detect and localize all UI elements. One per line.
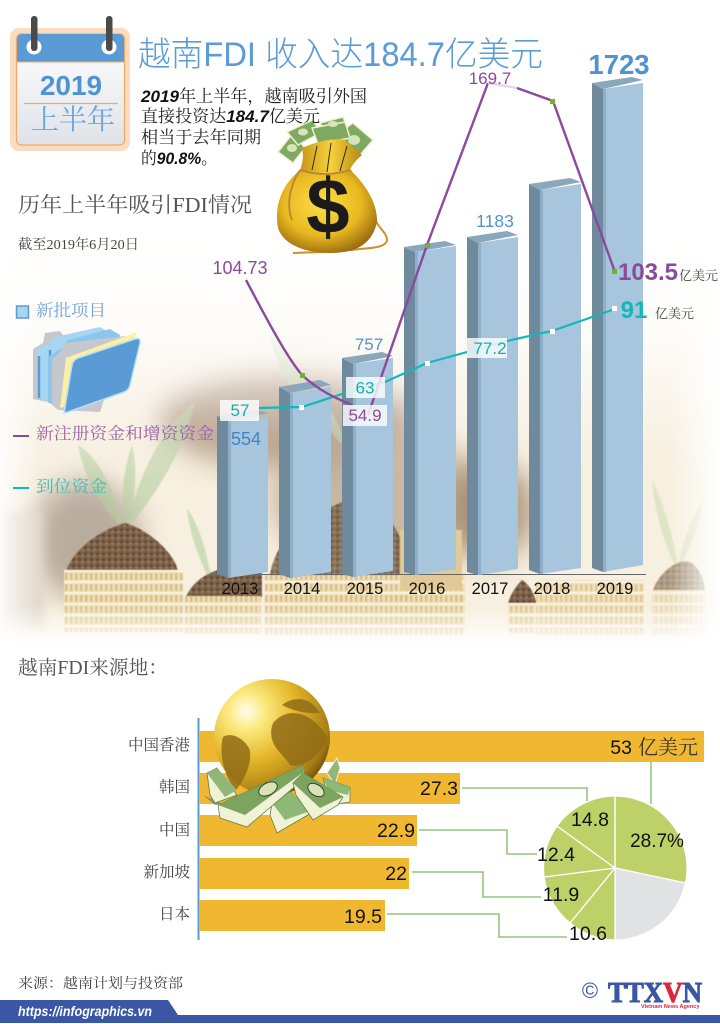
pie labels: 11.9 (543, 884, 579, 906)
intro text: 的90.8%。 (141, 149, 217, 168)
calendar icon: 2019 (40, 70, 102, 101)
teal value boxes: 63 (356, 378, 374, 398)
icon: folders (33, 327, 140, 413)
line: disbursed capital (259, 306, 617, 410)
bar 2016 (404, 241, 456, 575)
logo: TTXVN: TTXVN (608, 977, 702, 1009)
chart heading: 历年上半年吸引FDI情况 (18, 193, 252, 217)
year labels: 2019 (597, 580, 633, 598)
logo: TTXVN: Vietnam News Agency (641, 1004, 700, 1010)
bar chart: new projects (217, 77, 643, 578)
intro text (140, 86, 367, 168)
calendar icon: 上半年 (31, 104, 115, 135)
purple value labels: 103.5 (618, 259, 678, 286)
pie labels: 10.6 (569, 923, 607, 945)
icon: money bag: $ (306, 162, 350, 250)
year labels: 2013 (222, 580, 258, 598)
title: 越南FDI 收入达184.7亿美元 (138, 36, 543, 74)
intro text: 2019年上半年，越南吸引外国 (140, 86, 367, 106)
teal value boxes: 57 (231, 401, 249, 420)
horizontal bar chart: FDI sources: 韩国 (159, 778, 190, 796)
pie chart (543, 796, 687, 940)
pie labels (537, 809, 684, 945)
calendar icon (10, 16, 130, 151)
horizontal bar chart: FDI sources: 亿美元 (638, 736, 698, 759)
bar 2018 (529, 178, 581, 574)
year labels (222, 580, 633, 598)
purple value labels: 169.7 (469, 69, 511, 88)
bar 2019 (592, 77, 643, 572)
legend: disbursed capital: 到位资金 (36, 477, 107, 496)
chart axis (209, 574, 646, 576)
horizontal bar chart: FDI sources: 53 (610, 737, 632, 759)
horizontal bar chart: FDI sources: 22.9 (377, 820, 415, 842)
purple value labels: 54.9 (348, 406, 382, 425)
year labels: 2017 (472, 580, 508, 598)
horizontal bar chart: FDI sources: 22 (385, 863, 407, 885)
purple value labels (212, 69, 678, 426)
year labels: 2016 (409, 580, 445, 598)
footer band: https://infographics.vn (18, 1003, 152, 1019)
bar value labels: 1723 (588, 49, 650, 80)
icon: golden globe with money (203, 679, 350, 833)
pie labels: 12.4 (537, 844, 575, 866)
horizontal bar chart: FDI sources (128, 718, 704, 940)
line: registered capital (246, 83, 617, 415)
teal value boxes (220, 297, 647, 421)
unit labels: 亿美元 (655, 306, 694, 321)
teal value boxes: 77.2 (473, 339, 507, 358)
background photo: coins and seedlings (2, 334, 707, 636)
intro text: 相当于去年同期 (141, 127, 261, 147)
bar value labels: 554 (231, 429, 261, 449)
source note: 来源：越南计划与投资部 (18, 975, 183, 992)
legend: new projects: 新批项目 (36, 301, 106, 320)
bar value labels: 1183 (476, 211, 514, 231)
horizontal bar chart: FDI sources: 新加坡 (143, 863, 190, 881)
footer band (0, 1000, 720, 1023)
horizontal bar chart: FDI sources: 19.5 (344, 906, 382, 928)
horizontal bar chart: FDI sources: 27.3 (420, 778, 458, 800)
pie labels: 14.8 (571, 809, 609, 831)
bar value labels (231, 49, 650, 449)
bar value labels: 757 (355, 335, 383, 354)
unit labels (655, 268, 718, 321)
leader lines (387, 762, 651, 937)
intro text: 直接投资达184.7亿美元 (141, 106, 320, 126)
bar 2017 (467, 231, 518, 575)
horizontal bar chart: FDI sources: 中国 (159, 821, 190, 839)
legend: newly registered capital: 新注册资金和增资资金 (36, 424, 214, 443)
year labels: 2018 (534, 580, 570, 598)
bar 2015 (342, 352, 393, 577)
bar 2014 (279, 380, 331, 578)
year labels: 2014 (284, 580, 320, 598)
teal value boxes: 91 (621, 297, 647, 324)
unit labels: 亿美元 (679, 268, 718, 283)
purple value labels: 104.73 (212, 258, 268, 278)
icon: money bag (277, 117, 387, 253)
horizontal bar chart: FDI sources: 中国香港 (128, 736, 190, 754)
logo: TTXVN: © (582, 978, 598, 1003)
horizontal bar chart: FDI sources: 日本 (159, 905, 190, 923)
pie labels: 28.7% (630, 831, 684, 852)
chart subheading: 截至2019年6月20日 (18, 236, 139, 253)
bar 2013 (217, 410, 268, 578)
year labels: 2015 (347, 580, 383, 598)
source section heading: 越南FDI来源地： (18, 657, 168, 679)
